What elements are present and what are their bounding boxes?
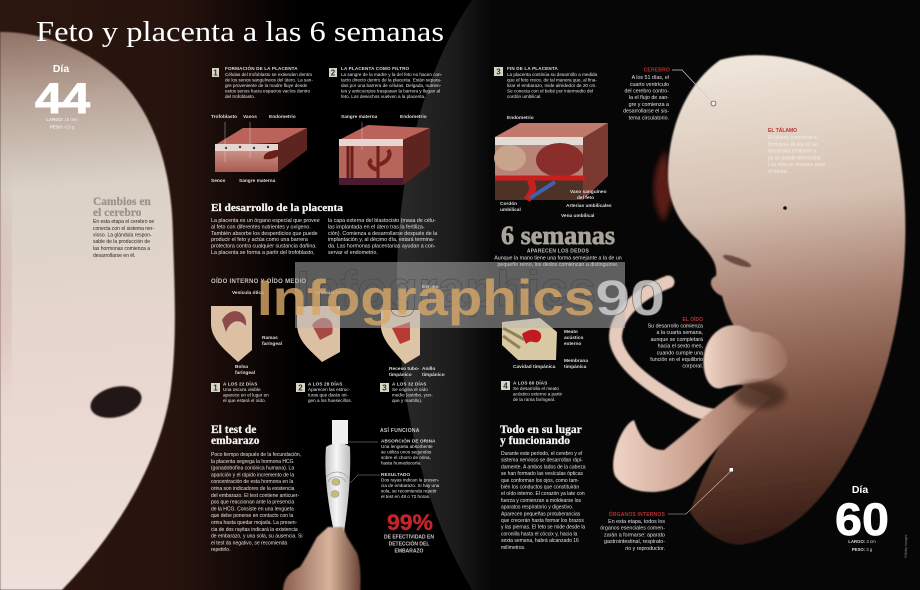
callout: el tálamo: Los ojos se mueven para xyxy=(768,162,825,168)
callout: el tálamo: EL TÁLAMO xyxy=(768,127,797,134)
text block: cambios en el cerebro xyxy=(93,196,154,259)
step: a los 32 días: Se origina el oído xyxy=(392,387,428,392)
section: el desarrollo de la placenta: La placenta es un órgano especial que provee xyxy=(211,218,320,224)
section: oído interno y oído medio: externo xyxy=(564,341,581,347)
title: Feto y placenta a las 6 semanas xyxy=(36,17,444,48)
diagram 3: tissue block with cord: del feto xyxy=(577,195,594,201)
section: todo en su lugar y funcionando: damente. A ambos lados de la cabeza xyxy=(501,464,586,470)
callout: el oído: hacia el sexto mes, xyxy=(658,344,703,350)
diagram 1: tissue block: Sangre materna xyxy=(239,178,276,184)
section: así funciona: Dos rayas indican la presen- xyxy=(381,478,440,482)
step: a los 22 días: Una oscura visible xyxy=(223,387,261,392)
step: a los 32 días: A LOS 32 DÍAS xyxy=(392,380,426,386)
section: todo en su lugar y funcionando: coronilla hasta el cóccix y, hacia la xyxy=(501,531,578,537)
section: el test de embarazo: el test da negativo, se recomienda xyxy=(211,540,287,546)
callout: cerebro: del cerebro contro- xyxy=(625,88,669,94)
step: a los 28 días: gen a los huesecillos. xyxy=(308,398,352,403)
text block: cambios en el cerebro: las hormonas comienza a xyxy=(93,246,150,252)
diagram 1: tissue block: Senos xyxy=(211,178,226,184)
diagram 2: tissue block: Sangre materna xyxy=(341,114,378,120)
section: oído interno y oído medio: timpánico xyxy=(389,372,412,378)
section: oído interno y oído medio: timpánica xyxy=(564,364,587,370)
step 1: formación de la placenta xyxy=(212,64,313,99)
section: oído interno y oído medio: Estribo xyxy=(422,284,439,290)
icon: embryo eye xyxy=(89,385,143,419)
section: así funciona: el test en 48 o 72 horas. xyxy=(381,494,430,499)
section: el desarrollo de la placenta: producir el feto y actúa como una barrera xyxy=(211,237,308,243)
step 2: la placenta como filtro: La sangre de la madre y la del feto no hacen con- xyxy=(341,72,443,77)
section: el desarrollo de la placenta: También absorbe los desperdicios que puede xyxy=(211,231,318,237)
step: a los 60 días: 4 xyxy=(503,382,508,390)
step: a los 32 días: medio (estribo, yun- xyxy=(392,392,433,398)
callout: el oído: EL OÍDO xyxy=(683,315,703,323)
callout: el tálamo: El tálamo comienza a xyxy=(768,135,817,141)
day 60 stats: 60 xyxy=(835,494,889,545)
diagram 3: tissue block with cord: Vena umbilical xyxy=(561,213,594,219)
section: oído interno y oído medio: faríngeal xyxy=(262,341,282,347)
heading: 6 semanas: APARECEN LOS DEDOS xyxy=(527,248,590,254)
diagram 3: tissue block with cord: Vaso sanguíneo xyxy=(570,189,607,195)
diagram 1: tissue block xyxy=(211,114,307,184)
section: el desarrollo de la placenta: ción). Comienza a desarrollarse después de la xyxy=(328,231,437,237)
step: a los 28 días xyxy=(296,380,352,403)
step 3: fin de la placenta: que el feto crece, de tal manera que, al fina- xyxy=(507,78,597,82)
section: todo en su lugar y funcionando: que conforman los ojos, como tam- xyxy=(501,478,579,484)
diagram 1: tissue block: Vasos xyxy=(243,114,257,120)
text block: cambios en el cerebro: sable de la producción de xyxy=(93,239,150,245)
heading: 6 semanas: pequeño remo, los dedos comienzan a distinguirse. xyxy=(497,262,619,268)
callout: órganos internos: rio y reproductor. xyxy=(625,546,665,552)
illustration: day 60 fetus xyxy=(613,55,905,545)
section: todo en su lugar y funcionando: Durante este período, el cerebro y el xyxy=(501,451,582,457)
step: a los 60 días: acústico externo a partir xyxy=(513,392,562,396)
stat callout: 99%: DETECCIÓN DEL xyxy=(389,540,429,548)
section: el desarrollo de la placenta: la capa externa del blastocisto (masa de célu- xyxy=(328,218,436,224)
callout: órganos internos: órganos esenciales comen- xyxy=(600,526,665,532)
callout: el oído: corporal. xyxy=(682,364,703,370)
section: oído interno y oído medio: Meato xyxy=(564,329,578,335)
section: el desarrollo de la placenta: al feto con diferentes nutrientes y oxígeno. xyxy=(211,224,311,230)
section: oído interno y oído medio: Vesícula ótica xyxy=(315,290,347,296)
section: el test de embarazo: de la HCG. Consiste en una lengüeta xyxy=(211,506,294,512)
step 2: la placenta como filtro: das por una barrera de células. Delgada, nutrien- xyxy=(341,83,442,88)
section: el test de embarazo: que debe ponerse en contacto con la xyxy=(211,513,294,519)
heading: 6 semanas: Aunque la mano tiene una forma semejante a la de un xyxy=(494,256,622,262)
image credit: ©Getty Images xyxy=(904,534,908,558)
step: a los 28 días: 2 xyxy=(298,384,303,392)
day 60 stats: Día xyxy=(852,484,868,496)
diagram 1: tissue block: Endometrio xyxy=(269,114,296,120)
section: oído interno y oído medio: Vesícula ótica xyxy=(232,290,264,296)
step: a los 22 días: aparece en el lugar en xyxy=(223,392,269,398)
section: todo en su lugar y funcionando: aparatos respiratorio y digestivo. xyxy=(501,505,573,511)
callout: cerebro: A los 51 días, el xyxy=(632,75,669,81)
section: todo en su lugar y funcionando: y funcionando xyxy=(500,435,570,447)
section: todo en su lugar y funcionando: sexta semana, habrá alcanzado 16 xyxy=(501,538,579,544)
section: el test de embarazo: concentración de esta hormona en la xyxy=(211,479,293,485)
watermark: infographics90: Infographics xyxy=(257,270,595,326)
step: a los 22 días xyxy=(211,380,269,403)
callout: órganos internos: zarán a formarse: aparato xyxy=(604,532,665,538)
section: el desarrollo de la placenta: implantación y, al décimo día, estará termina- xyxy=(328,237,435,243)
section: el desarrollo de la placenta: las implantada en el útero tras la fertiliza- xyxy=(328,224,425,230)
callout: el oído: a la cuarta semana, xyxy=(656,330,703,336)
section: oído interno y oído medio: Cavidad timpánica xyxy=(513,364,556,370)
section: todo en su lugar y funcionando xyxy=(500,424,586,551)
step: a los 28 días: turas que darán ori- xyxy=(308,392,349,398)
day 44 stats xyxy=(35,63,90,130)
step 3: fin de la placenta: Se conecta con el bebé por intermedio del xyxy=(507,88,593,94)
section: todo en su lugar y funcionando: sistema nervioso se desarrollan rápi- xyxy=(501,458,583,464)
watermark: infographics90 xyxy=(257,261,665,328)
step 1: formación de la placenta: del trofoblasto. xyxy=(225,94,255,99)
illustration: umbilical cord xyxy=(615,282,712,415)
step 1: formación de la placenta: de los senos sanguíneos del útero. La san- xyxy=(225,78,313,82)
diagram 2: tissue block xyxy=(339,114,430,185)
callout: el oído: cuando cumple una xyxy=(657,350,703,356)
section: el test de embarazo: del embarazo. El test contiene anticuer- xyxy=(211,493,299,499)
section: oído interno y oído medio: Bolsa xyxy=(235,364,248,370)
diagram 3: tissue block with cord: Endometrio xyxy=(507,115,534,121)
stat callout: 99% xyxy=(384,510,434,554)
stat callout: 99%: DE EFECTIVIDAD EN xyxy=(384,534,434,540)
section: el desarrollo de la placenta: da. Las hormonas placentarias ayudan a con- xyxy=(328,244,436,250)
callout: órganos internos: ÓRGANOS INTERNOS xyxy=(609,510,665,518)
diagram: ear stage 3 xyxy=(381,310,420,364)
step: a los 28 días: Aparecen las estruc- xyxy=(308,387,351,392)
step 2: la placenta como filtro: feto. Los desechos vuelven a la placenta. xyxy=(341,94,425,99)
step 2: la placenta como filtro: tes y anticuerpos traspasan la barrera y llegan al xyxy=(341,88,440,94)
illustration: fetus arm and hand xyxy=(704,325,787,388)
section: oído interno y oído medio: Membrana xyxy=(564,358,588,364)
step 3: fin de la placenta xyxy=(494,66,598,99)
step 2: la placenta como filtro: tacto directo dentro de la placenta. Están separa- xyxy=(341,78,442,82)
day 60 stats: LARGO: 3 cm xyxy=(848,539,876,544)
section: así funciona: Una lengüeta absorbente xyxy=(381,444,433,449)
text block: cambios en el cerebro: conecta con el sistema ner- xyxy=(93,226,154,232)
step: a los 22 días: 1 xyxy=(213,384,218,392)
step 1: formación de la placenta: gre proveniente de la madre fluye desde xyxy=(225,83,308,88)
step: a los 60 días: A LOS 60 DÍAS xyxy=(513,378,547,386)
section: todo en su lugar y funcionando: y las piernas. El feto se mide desde la xyxy=(501,525,585,531)
step 1: formación de la placenta: estos senos hacia espacios vacíos dentro xyxy=(225,88,310,94)
section: el test de embarazo xyxy=(211,424,302,553)
section: el test de embarazo: orina hasta quedar mojada. La presen- xyxy=(211,520,298,526)
stat callout: 99%: EMBARAZO xyxy=(395,548,424,554)
step 1: formación de la placenta: FORMACIÓN DE LA PLACENTA xyxy=(225,64,298,71)
section: todo en su lugar y funcionando: el oído interno. El corazón ya late con xyxy=(501,491,585,497)
section: el test de embarazo: cia de dos rayitas indicará la existencia xyxy=(211,527,298,533)
step: a los 60 días: Se desarrolla el meato xyxy=(513,386,559,391)
section: el test de embarazo: Poco tiempo después de la fecundación, xyxy=(211,452,301,458)
section: el desarrollo de la placenta: protectora contra cualquier sustancia dañina. xyxy=(211,244,317,250)
section: el desarrollo de la placenta: servar el endometrio. xyxy=(328,250,378,256)
icon: test stick xyxy=(325,420,350,532)
diagram 3: tissue block with cord: Arterias umbilicales xyxy=(566,203,612,209)
step: a los 32 días: 3 xyxy=(382,384,387,392)
diagram 3: tissue block with cord: umbilical xyxy=(500,207,521,213)
section: así funciona: sobre el chorro de orina, xyxy=(381,455,431,460)
section: oído interno y oído medio: faríngeal xyxy=(235,370,255,376)
callout: cerebro xyxy=(623,68,716,122)
section: oído interno y oído medio xyxy=(211,277,588,378)
watermark: infographics90: 90 xyxy=(595,270,665,326)
section: así funciona: ASÍ FUNCIONA xyxy=(380,426,420,434)
illustration: fetus leg and foot xyxy=(613,386,772,492)
step 3: fin de la placenta: cordón umbilical. xyxy=(507,94,541,99)
callout: el oído: Su desarrollo comienza xyxy=(648,324,703,330)
section: oído interno y oído medio: Ramas xyxy=(262,335,278,341)
section: oído interno y oído medio: OÍDO INTERNO Y OÍDO MEDIO xyxy=(211,277,306,285)
section: todo en su lugar y funcionando: bién los conductos que constituirán xyxy=(501,484,579,490)
section: el test de embarazo: (gonadotrofina coriónica humana). La xyxy=(211,466,294,472)
callout: el tálamo: el frente. xyxy=(768,169,788,175)
section: así funciona xyxy=(380,426,440,499)
step: a los 60 días: de la rama faríngeal. xyxy=(513,397,555,402)
watermark: infographics90: Infographics xyxy=(296,261,596,317)
diagram 2: tissue block: Endometrio xyxy=(400,114,427,120)
diagram: ear stage 4 xyxy=(502,318,557,360)
heading: 6 semanas xyxy=(494,221,622,268)
diagram 1: tissue block: Trofoblasto xyxy=(211,114,237,120)
callout: el tálamo: ya se puede diferenciar. xyxy=(768,155,822,161)
section: así funciona: RESULTADO xyxy=(381,472,411,477)
section: el test de embarazo: embarazo xyxy=(211,435,260,447)
step: a los 28 días: A LOS 28 DÍAS xyxy=(308,380,342,386)
callout: el oído xyxy=(648,315,703,370)
diagram 3: tissue block with cord: Cordón xyxy=(500,201,517,207)
text block: cambios en el cerebro: En esta etapa el cerebro se xyxy=(93,219,154,225)
stat callout: 99%: 99% xyxy=(387,510,433,535)
step: a los 32 días: que y martillo). xyxy=(392,398,422,403)
step 2: la placenta como filtro: LA PLACENTA COMO FILTRO xyxy=(341,66,410,71)
step: a los 32 días xyxy=(380,380,433,403)
day 44 stats: PESO: 0,5 g xyxy=(50,124,75,130)
callout: cerebro: CEREBRO xyxy=(644,68,670,74)
day 60 stats xyxy=(835,484,889,552)
section: oído interno y oído medio: Receso tubo- xyxy=(389,366,420,372)
callout: el tálamo: desarrolla el tálamo y xyxy=(768,149,817,155)
step 1: formación de la placenta: Células del trofoblasto se extienden dentro xyxy=(225,72,313,77)
callout: el oído: aunque se completará xyxy=(651,337,703,343)
callout: el oído: función en el equilibrio xyxy=(650,357,703,363)
section: así funciona: se utiliza unos segundos xyxy=(381,450,432,454)
callout: cerebro: la el flujo de san- xyxy=(629,95,669,101)
callout: cerebro: tema circulatorio. xyxy=(629,116,669,122)
diagram 3: tissue block with cord xyxy=(494,115,612,219)
text block: cambios en el cerebro: Cambios en xyxy=(93,196,151,208)
step 1: formación de la placenta: 1 xyxy=(213,68,218,78)
section: todo en su lugar y funcionando: se han formado las vesículas ópticas xyxy=(501,471,583,477)
section: todo en su lugar y funcionando: milímetros. xyxy=(501,545,525,551)
day 44 stats: LARGO: 15 mm xyxy=(46,117,78,122)
step 3: fin de la placenta: 3 xyxy=(496,68,501,76)
callout: el tálamo xyxy=(768,127,825,210)
section: oído interno y oído medio: acústico xyxy=(564,335,584,341)
callout: órganos internos: En esta etapa, todos los xyxy=(608,519,665,525)
text block: cambios en el cerebro: desarrollarse en él. xyxy=(93,253,136,259)
section: el test de embarazo: aparición y el rápido incremento de la xyxy=(211,472,294,478)
callout: cerebro: desarrollarse el sis- xyxy=(623,109,669,115)
section: el test de embarazo: de embarazo, y una sola, su ausencia. Si xyxy=(211,534,302,540)
diagram: ear stage 1 xyxy=(211,306,252,362)
illustration: hand holding pregnancy test xyxy=(283,420,380,590)
section: todo en su lugar y funcionando: fuerza y comienzan a moldearse los xyxy=(501,498,582,504)
text block: cambios en el cerebro: vioso. La glándula respon- xyxy=(93,232,152,238)
callout: cerebro: cuarto ventrículo xyxy=(630,82,669,88)
section: el desarrollo de la placenta: La placenta se forma a partir del trofoblasto, xyxy=(211,250,315,256)
diagram: ear stage 2 xyxy=(297,306,340,362)
callout: órganos internos xyxy=(600,468,733,552)
section: oído interno y oído medio: Anillo xyxy=(422,366,435,372)
section: el test de embarazo: El test de xyxy=(211,424,256,436)
callout: el tálamo: formarse. Al día 52 se xyxy=(768,142,818,148)
day 60 stats: PESO: 3 g xyxy=(852,547,873,552)
step 2: la placenta como filtro xyxy=(329,66,443,99)
section: así funciona: ABSORCIÓN DE ORINA xyxy=(381,436,436,444)
callout: órganos internos: gastrointestinal, respirato- xyxy=(604,539,665,545)
step 3: fin de la placenta: FIN DE LA PLACENTA xyxy=(507,66,558,71)
section: todo en su lugar y funcionando: Todo en su lugar xyxy=(500,424,582,436)
day 44 stats: 44 xyxy=(35,75,90,123)
text block: cambios en el cerebro: el cerebro xyxy=(93,207,142,219)
callout: cerebro: gre y comienza a xyxy=(629,102,669,108)
step 3: fin de la placenta: La placenta continúa su desarrollo a medida xyxy=(507,72,598,77)
step: a los 22 días: el que estará el oído. xyxy=(223,398,266,403)
section: el desarrollo de la placenta: El desarrollo de la placenta xyxy=(211,203,344,214)
heading: 6 semanas: 6 semanas xyxy=(501,221,615,250)
section: todo en su lugar y funcionando: Aparecen pequeñas protuberancias xyxy=(501,511,581,517)
step 2: la placenta como filtro: 2 xyxy=(331,68,336,78)
section: el test de embarazo: repetirlo. xyxy=(211,547,230,553)
section: así funciona: cia de embarazo. Si hay una xyxy=(381,483,440,488)
section: oído interno y oído medio: timpánico xyxy=(422,372,445,378)
section: así funciona: hasta humedecerla. xyxy=(381,460,421,466)
section: así funciona: sola, se recomienda repetir xyxy=(381,488,437,494)
section: el test de embarazo: la placenta segrega la hormona HCG xyxy=(211,459,294,465)
step: a los 22 días: A LOS 22 DÍAS xyxy=(223,380,257,386)
section: el test de embarazo: pos que reaccionan ante la presencia xyxy=(211,500,294,506)
illustration: day 44 embryo head xyxy=(0,32,175,590)
section: el test de embarazo: orina son indicadores de la existencia xyxy=(211,486,295,492)
section: todo en su lugar y funcionando: que crecerán hasta formar los brazos xyxy=(501,518,584,524)
section: el desarrollo de la placenta xyxy=(211,203,437,256)
day 44 stats: Día xyxy=(53,63,69,75)
step: a los 60 días xyxy=(501,378,562,402)
step 3: fin de la placenta: lizar el embarazo, mide alrededor de 20 cm. xyxy=(507,83,597,88)
